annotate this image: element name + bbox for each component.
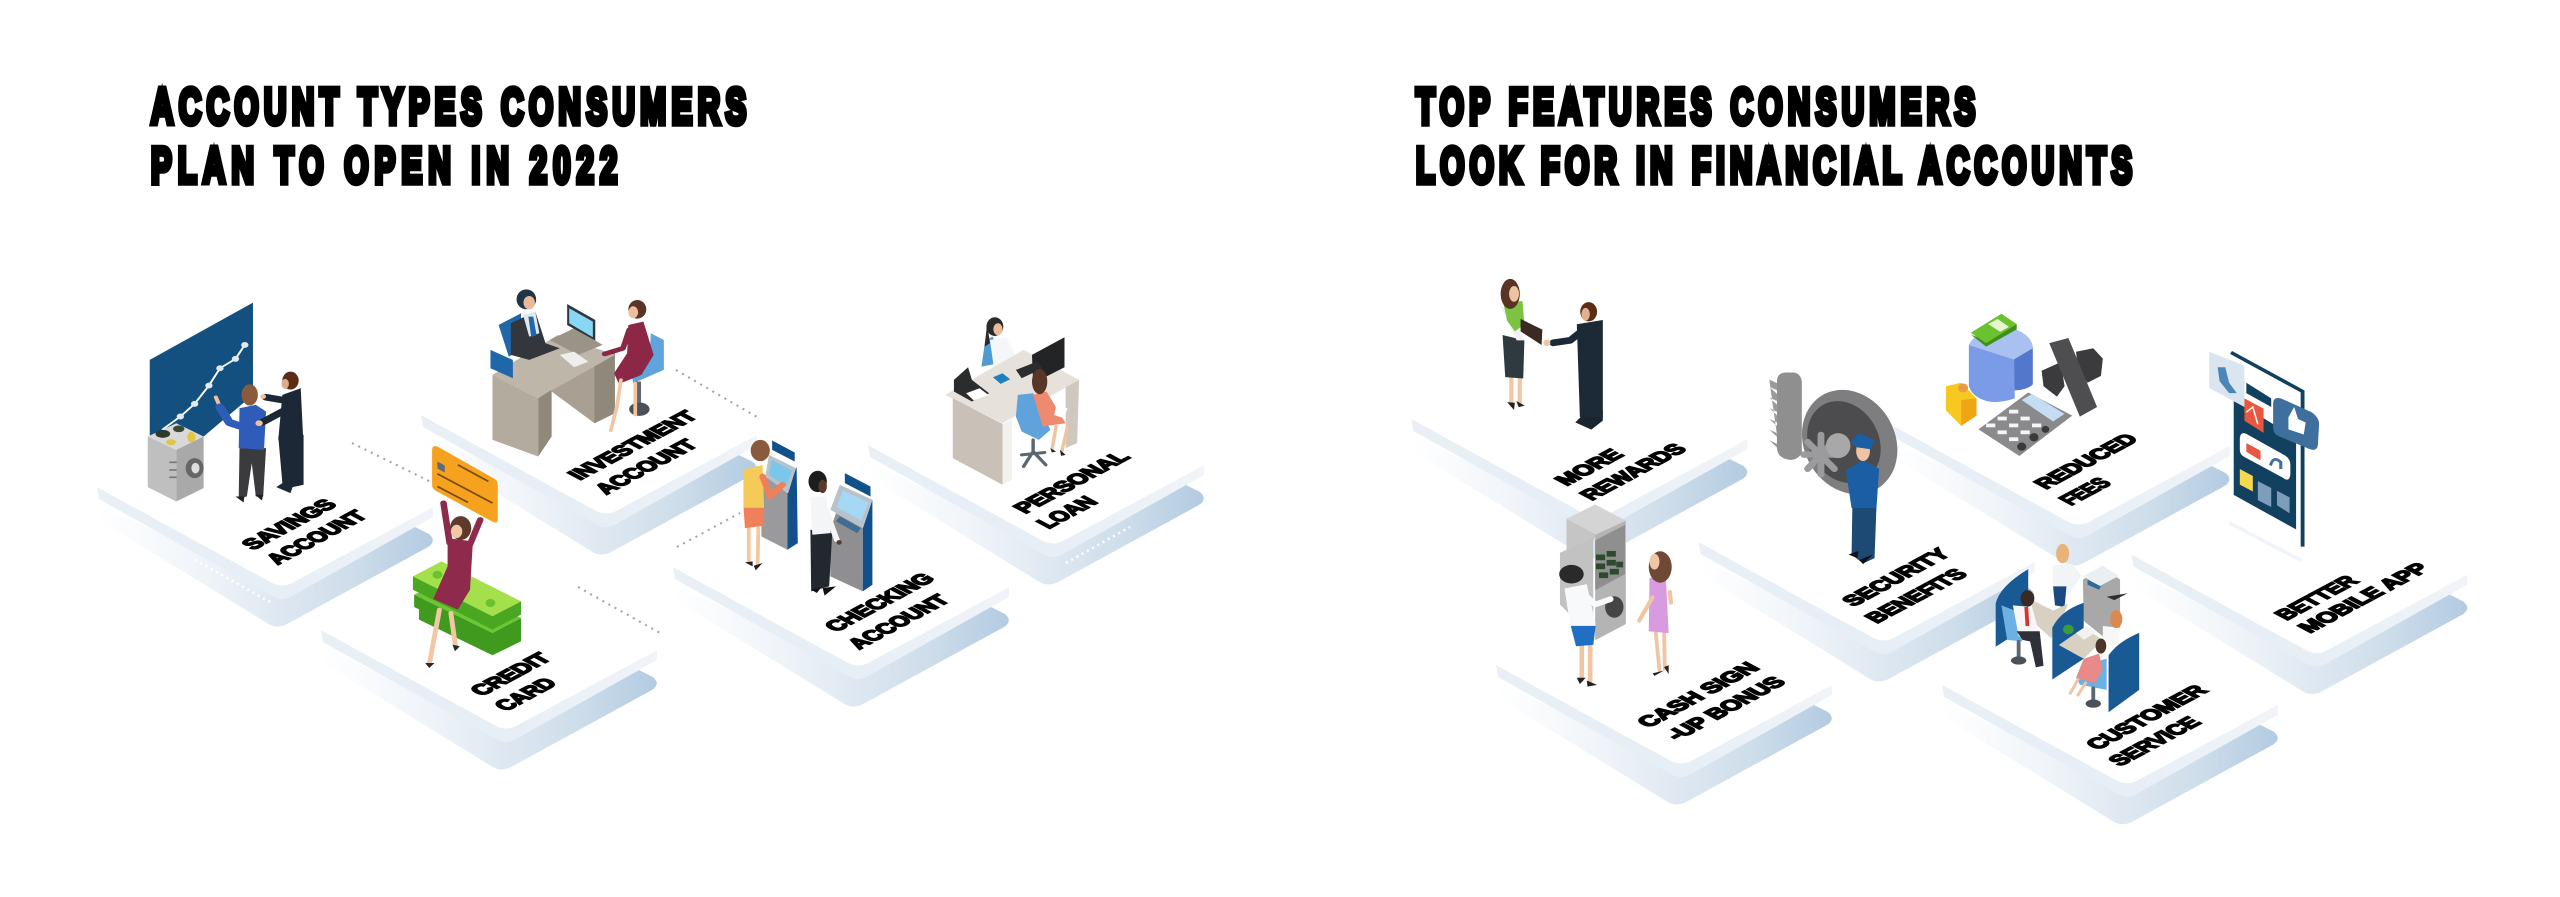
label: more rewards: REWARDS: [1574, 440, 1692, 503]
label: credit card: CREDIT: [464, 649, 557, 699]
label: savings account: ACCOUNT: [260, 507, 373, 567]
label: security benefits: BENEFITS: [1859, 565, 1973, 626]
panel: security benefits: [1698, 372, 2034, 682]
label: reduced fees: FEES: [2053, 474, 2117, 508]
title: top features: LOOK FOR IN FINANCIAL ACCOUNTS: [1416, 137, 2132, 193]
label: investment account: INVESTMENT: [562, 407, 703, 483]
label: cash sign-up bonus: [1631, 659, 1791, 743]
illustration: two ATMs with customers: [743, 440, 872, 596]
title: account types: ACCOUNT TYPES CONSUMERS: [151, 78, 746, 134]
illustration: smartphone with app tiles: [2209, 352, 2319, 563]
label: credit card: CARD: [488, 674, 562, 714]
illustration: woman holding credit card on money: [413, 446, 521, 668]
label: security benefits: [1836, 545, 1973, 626]
illustration: open safe and two women: [1559, 505, 1672, 687]
label: checking account: ACCOUNT: [842, 591, 956, 652]
panel: checking account: [673, 440, 1009, 706]
panel: cash sign-up bonus: [1496, 505, 1832, 804]
panel: customer service: [1942, 544, 2278, 824]
panel: more rewards: [1412, 279, 1748, 558]
label: security benefits: SECURITY: [1836, 545, 1956, 609]
label: more rewards: MORE: [1549, 446, 1629, 489]
label: reduced fees: REDUCED: [2028, 430, 2144, 492]
label: cash sign-up bonus: -UP BONUS: [1660, 673, 1791, 743]
panel: savings account: [97, 303, 433, 626]
panel: reduced fees: [1894, 314, 2230, 566]
label: savings account: SAVINGS: [236, 496, 342, 553]
illustration: customer service cubicles: [1996, 544, 2139, 712]
label: personal loan: LOAN: [1031, 493, 1103, 532]
illustration: pie chart, percent sign, calculator: [1946, 314, 2103, 456]
illustration: handshake: [1500, 279, 1603, 430]
label: customer service: SERVICE: [2102, 713, 2206, 769]
title: account types: [151, 78, 746, 193]
illustration: savings chart, safe and two people: [148, 303, 304, 502]
label: better mobile app: BETTER: [2269, 572, 2364, 623]
label: personal loan: PERSONAL: [1008, 448, 1135, 516]
label: customer service: CUSTOMER: [2080, 682, 2213, 753]
label: better mobile app: MOBILE APP: [2292, 560, 2435, 636]
illustration: investment advisor desk: [490, 289, 664, 456]
title: top features: [1416, 78, 2132, 193]
label: investment account: ACCOUNT: [589, 436, 704, 497]
title: top features: TOP FEATURES CONSUMERS: [1416, 78, 1975, 134]
panel: personal loan: [868, 317, 1204, 584]
title: account types: PLAN TO OPEN IN 2022: [151, 137, 617, 193]
panel: better mobile app: [2132, 352, 2468, 694]
panel: investment account: [421, 289, 757, 554]
illustration: vault door and guard: [1769, 372, 1914, 564]
label: cash sign-up bonus: CASH SIGN: [1631, 659, 1765, 730]
panel: credit card: [321, 446, 660, 770]
illustration: loan officer desk: [945, 317, 1079, 485]
label: checking account: CHECKING: [819, 570, 940, 635]
